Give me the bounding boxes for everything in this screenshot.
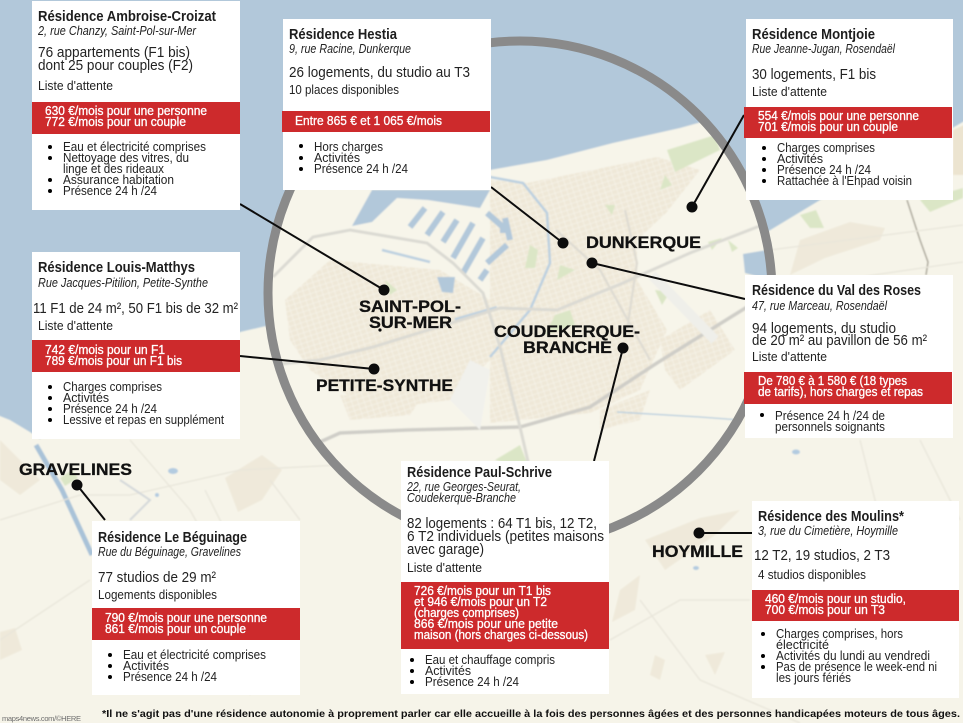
panel: Résidence Louis-Matthys — [32, 252, 240, 439]
services list: les jours fériés — [776, 671, 851, 685]
capacity: 12 T2, 19 studios, 2 T3 — [754, 547, 890, 564]
panel: Résidence des Moulins — [752, 501, 959, 698]
place labels: BRANCHE — [523, 338, 612, 357]
address: 9, rue Racine, Dunkerque — [289, 42, 411, 56]
capacity: 30 logements, F1 bis — [752, 66, 876, 83]
price band — [92, 608, 300, 640]
availability: Liste d'attente — [38, 79, 113, 93]
place labels: COUDEKERQUE- — [494, 322, 640, 341]
panel: Résidence Le Béguinage — [92, 521, 300, 695]
location dots — [72, 202, 704, 538]
address: Rue Jacques-Pitilion, Petite-Synthe — [38, 276, 208, 290]
price band: 772 €/mois pour un couple — [45, 115, 186, 129]
services list: Présence 24 h /24 — [425, 675, 519, 689]
services list: Présence 24 h /24 de — [775, 409, 885, 423]
address: 2, rue Chanzy, Saint-Pol-sur-Mer — [37, 24, 197, 38]
place labels: SUR-MER — [369, 313, 452, 332]
place labels: DUNKERQUE — [586, 233, 701, 252]
availability: Liste d'attente — [752, 85, 827, 99]
price band — [401, 582, 609, 649]
price band: 790 €/mois pour une personne — [105, 611, 267, 625]
services list: Eau et électricité comprises — [123, 648, 266, 662]
price band: 742 €/mois pour un F1 — [45, 343, 165, 357]
services list — [48, 380, 224, 427]
leader line: Le Béguinage — [77, 485, 105, 520]
address: 3, rue du Cimetière, Hoymille — [758, 524, 898, 538]
address: 47, rue Marceau, Rosendaël — [752, 299, 888, 313]
services list: Pas de présence le week-end ni — [776, 660, 937, 674]
capacity: avec garage) — [407, 541, 484, 558]
heading: Résidence Louis-Matthys — [38, 260, 195, 276]
leader line: Val des Roses — [592, 263, 745, 299]
heading: Résidence du Val des Roses — [752, 283, 921, 299]
services list — [762, 141, 912, 188]
price band — [744, 107, 952, 138]
services list: Présence 24 h /24 — [63, 402, 157, 416]
panel: Résidence du Val des Roses — [744, 275, 953, 438]
services list — [108, 648, 266, 684]
heading: Résidence Le Béguinage — [98, 530, 247, 546]
capacity: 94 logements, du studio — [752, 320, 896, 337]
address: Rue Jeanne-Jugan, Rosendaël — [752, 42, 896, 56]
address: Coudekerque-Branche — [407, 491, 516, 505]
services list: Activités — [425, 664, 471, 678]
availability: 10 places disponibles — [289, 83, 399, 97]
capacity: 6 T2 individuels (petites maisons — [407, 528, 604, 545]
heading: Résidence des Moulins* — [758, 509, 904, 525]
capacity: 76 appartements (F1 bis) — [38, 44, 190, 61]
services list: Activités — [63, 391, 109, 405]
services list: Présence 24 h /24 — [777, 163, 871, 177]
price band — [752, 590, 959, 621]
availability: Liste d'attente — [38, 319, 113, 333]
panel: Résidence Ambroise-Croizat — [32, 1, 240, 210]
services list: personnels soignants — [775, 420, 885, 434]
services list: Activités du lundi au vendredi — [776, 649, 930, 663]
price band: 726 €/mois pour un T1 bis — [414, 584, 551, 598]
price band — [32, 340, 240, 372]
capacity: 82 logements : 64 T1 bis, 12 T2, — [407, 515, 597, 532]
capacity — [38, 44, 193, 74]
services list: Présence 24 h /24 — [123, 670, 217, 684]
price band: 861 €/mois pour un couple — [105, 622, 246, 636]
capacity: 11 F1 de 24 m², 50 F1 bis de 32 m² — [33, 300, 238, 317]
heading: Résidence Hestia — [289, 27, 398, 43]
services list: Eau et chauffage compris — [425, 653, 555, 667]
availability: Logements disponibles — [98, 588, 217, 602]
place labels: PETITE-SYNTHE — [316, 376, 453, 395]
panel: Résidence Hestia — [282, 19, 491, 190]
price band: De 780 € à 1 580 € (18 types — [758, 374, 907, 388]
leader line: Moulins — [699, 532, 752, 534]
availability: Liste d'attente — [752, 350, 827, 364]
heading: Résidence Montjoie — [752, 27, 875, 43]
footnote: *Il ne s'agit pas d'une résidence autonomie à proprement parler car elle accueille à la fois des personnes âgées et des personnes handicapées moteurs de tous âges. — [102, 708, 960, 720]
map: zoomed lens around Dunkerque — [272, 122, 767, 470]
services list — [299, 140, 408, 176]
services list: Lessive et repas en supplément — [63, 413, 224, 427]
address: Rue du Béguinage, Gravelines — [98, 545, 241, 559]
price band: 460 €/mois pour un studio, — [765, 592, 906, 606]
leader line: Montjoie — [692, 115, 744, 207]
price band — [282, 111, 490, 132]
services list — [760, 409, 885, 434]
services list — [48, 140, 206, 198]
services list: Charges comprises, hors — [776, 627, 903, 641]
price band: 554 €/mois pour une personne — [758, 109, 919, 123]
services list: Rattachée à l'Ehpad voisin — [777, 174, 912, 188]
services list: Assurance habitation — [63, 173, 174, 187]
price band: (charges comprises) — [414, 606, 519, 620]
capacity: dont 25 pour couples (F2) — [38, 57, 193, 74]
services list: Eau et électricité comprises — [63, 140, 206, 154]
services list: Présence 24 h /24 — [314, 162, 408, 176]
price band: 630 €/mois pour une personne — [45, 104, 207, 118]
panel: Résidence Montjoie — [744, 19, 953, 200]
services list: Présence 24 h /24 — [63, 184, 157, 198]
availability: Liste d'attente — [407, 561, 482, 575]
price band: 866 €/mois pour une petite — [414, 617, 558, 631]
heading: Résidence Ambroise-Croizat — [38, 9, 216, 25]
services list: Hors charges — [314, 140, 383, 154]
price band: 701 €/mois pour un couple — [758, 120, 898, 134]
panel: Résidence Paul-Schrive — [401, 461, 609, 694]
price band: maison (hors charges ci-dessous) — [414, 628, 588, 642]
services list: électricité — [776, 638, 829, 652]
price band: Entre 865 € et 1 065 €/mois — [295, 114, 442, 128]
address — [406, 480, 521, 505]
leader line: Paul-Schrive — [594, 348, 623, 461]
place labels — [19, 233, 743, 561]
capacity — [407, 515, 604, 558]
place labels: GRAVELINES — [19, 460, 132, 479]
place labels: SAINT-POL- — [359, 297, 461, 316]
services list: Charges comprises — [63, 380, 162, 394]
price band — [32, 102, 240, 134]
services list: Nettoyage des vitres, du — [63, 151, 189, 165]
capacity: 26 logements, du studio au T3 — [289, 64, 470, 81]
availability: 4 studios disponibles — [758, 568, 866, 582]
capacity — [752, 320, 927, 349]
leader line: Hestia — [491, 187, 563, 243]
map: lens ring — [268, 41, 772, 545]
address: 22, rue Georges-Seurat, — [406, 480, 521, 494]
price band: 700 €/mois pour un T3 — [765, 603, 885, 617]
leader line: Ambroise-Croizat — [240, 204, 384, 290]
capacity: de 20 m² au pavillon de 56 m² — [752, 332, 927, 349]
capacity: 77 studios de 29 m² — [98, 569, 216, 586]
services list: Activités — [314, 151, 360, 165]
services list — [761, 627, 937, 685]
price band: de tarifs), hors charges et repas — [758, 385, 923, 399]
services list: Activités — [123, 659, 169, 673]
price band: 789 €/mois pour un F1 bis — [45, 354, 182, 368]
services list: Charges comprises — [777, 141, 875, 155]
map credit: maps4news.com/©HERE — [2, 714, 81, 723]
services list — [410, 653, 555, 689]
price band: et 946 €/mois pour un T2 — [414, 595, 547, 609]
services list: Activités — [777, 152, 823, 166]
services list: linge et des rideaux — [63, 162, 165, 176]
leader line: Louis-Matthys — [240, 356, 374, 369]
price band — [744, 372, 952, 404]
place labels: HOYMILLE — [652, 542, 743, 561]
heading: Résidence Paul-Schrive — [407, 465, 552, 481]
